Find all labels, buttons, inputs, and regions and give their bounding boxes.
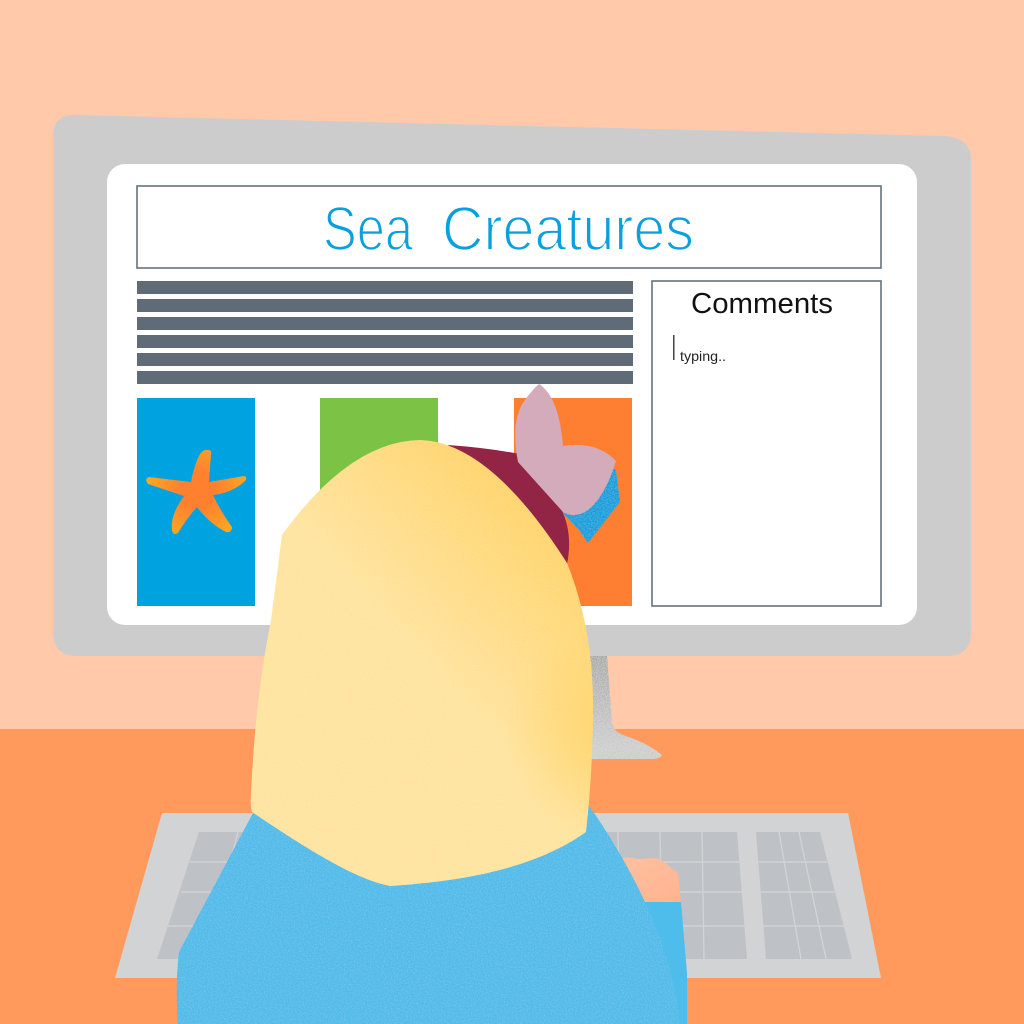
key grid lines bbox=[168, 832, 844, 959]
keyboard base bbox=[115, 813, 881, 978]
comments heading: Comments bbox=[691, 288, 833, 320]
tail fin in pink bbox=[515, 384, 616, 515]
monitor bbox=[53, 115, 971, 656]
comments panel bbox=[652, 281, 881, 606]
headband bbox=[448, 445, 569, 564]
wall background bbox=[0, 0, 1024, 730]
arm sleeve bbox=[640, 902, 687, 1024]
monitor stand bbox=[588, 656, 662, 759]
article text lines bbox=[137, 281, 633, 384]
image card: starfish bbox=[137, 398, 255, 606]
image card: green bbox=[320, 398, 438, 606]
typing text: typing.. bbox=[680, 348, 726, 364]
screen bbox=[107, 164, 917, 625]
tail shadow in blue bbox=[563, 462, 620, 543]
keyboard main key block bbox=[157, 832, 747, 959]
image card: orange bbox=[514, 398, 632, 606]
person: body in blue sweater bbox=[177, 807, 680, 1024]
keyboard bbox=[115, 813, 881, 978]
web page title box bbox=[137, 186, 881, 268]
hand on keyboard bbox=[621, 858, 681, 902]
monitor bezel bbox=[53, 115, 971, 656]
person: blonde hair bbox=[251, 440, 593, 886]
icon: starfish bbox=[146, 450, 246, 534]
fish tail in orange card bbox=[515, 384, 620, 543]
keyboard number key block bbox=[756, 832, 852, 959]
heading: Sea Creatures: Creatures bbox=[442, 195, 694, 264]
text cursor bbox=[673, 335, 674, 360]
desk bbox=[0, 729, 1024, 1024]
heading: Sea Creatures: Sea bbox=[323, 195, 413, 264]
